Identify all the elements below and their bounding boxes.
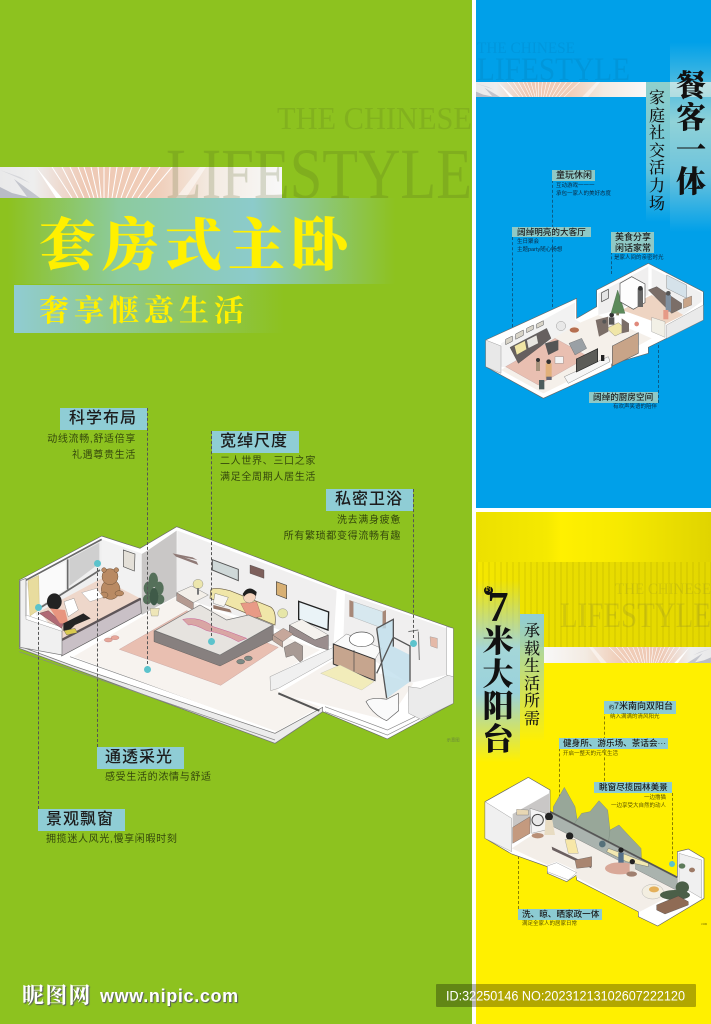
title: 餐客一体: 体 — [676, 157, 706, 201]
callout: 通透采光: 感受生活的浓情与舒适 — [105, 772, 212, 783]
subtitle: 承载生活所需: 需 — [524, 706, 540, 729]
note: illustration caption: 示意图 — [447, 737, 460, 744]
rug — [506, 338, 588, 385]
wall frame — [602, 289, 608, 302]
subtitle: 家庭社交活力场: 交 — [649, 138, 665, 161]
title: 7米大阳台: 7 — [488, 585, 508, 631]
callout: 健身所 游乐场 茶话会: 健身所、游乐场、茶话会··· — [563, 738, 666, 748]
callout: 眺窗尽揽园林美景 — [594, 782, 672, 809]
man in bed — [213, 588, 262, 618]
stripe texture — [476, 562, 711, 647]
callout: 宽绰尺度 — [212, 431, 316, 483]
shelves and pictures — [173, 553, 287, 599]
callout: 阔绰的厨房空间: 有欢声笑语的陪伴 — [613, 404, 657, 410]
subtitle: 家庭社交活力场: 场 — [649, 191, 665, 214]
badge: 约: 约 — [485, 587, 492, 593]
callout lines and dots — [35, 408, 417, 809]
panel: blue living room poster — [476, 0, 711, 508]
decorative heading: lifestyle: LIFESTYLE — [477, 52, 630, 88]
callout: 阔绰明亮的大客厅: 主题party随心畅想 — [517, 247, 562, 253]
callout: 景观飘窗: 拥揽迷人风光,慢享闲暇时刻 — [46, 834, 178, 845]
callout: 童玩休闲 — [552, 170, 611, 197]
woman with laundry — [532, 813, 555, 838]
callout: 阔绰明亮的大客厅 — [512, 227, 591, 253]
shell — [486, 263, 703, 398]
yoga person and bench — [552, 832, 592, 868]
woman reading — [39, 588, 103, 635]
callout: 科学布局: 动线流畅,舒适倍享 — [47, 434, 136, 445]
subtitle: 承载生活所需: 生 — [524, 653, 540, 676]
callout: 私密卫浴: 洗去满身疲惫 — [337, 515, 401, 526]
callout lines — [512, 181, 659, 403]
shell — [485, 777, 704, 926]
subtitle: 承载生活所需 — [524, 618, 540, 729]
title: 7米大阳台: 大 — [482, 648, 514, 694]
callout: 景观飘窗: 景观飘窗 — [46, 811, 114, 828]
fan texture strip — [476, 82, 711, 97]
low partition wall — [270, 647, 333, 711]
panel: yellow balcony poster — [476, 512, 711, 1024]
washer and cabinet — [513, 808, 546, 843]
callout: 通透采光 — [97, 747, 212, 783]
callout: 美食分享 闲话家常: 是家人间的亲密时光 — [614, 255, 664, 261]
callout: 眺窗尽揽园林美景: 一边撸猫 — [644, 795, 666, 801]
subtitle: 家庭社交活力场 — [649, 85, 665, 214]
callout: 约7米南向双阳台: 约7米南向双阳台 — [609, 701, 673, 711]
plants — [657, 863, 695, 914]
family group — [536, 321, 587, 389]
callout: 洗晾晒家政一体 — [518, 909, 602, 927]
callout: 宽绰尺度: 宽绰尺度 — [220, 433, 288, 450]
callout: 科学布局: 科学布局 — [69, 410, 137, 427]
callout: 健身所 游乐场 茶话会: 开启一整天的元气生活 — [563, 751, 618, 757]
callout lines — [518, 714, 675, 909]
callout: 洗晾晒家政一体: 洗、晾、晒家政一体 — [522, 909, 599, 919]
callout: 私密卫浴: 私密卫浴 — [335, 491, 403, 508]
tv unit — [564, 349, 610, 383]
callout: 美食分享 闲话家常 — [611, 232, 664, 261]
callout: 宽绰尺度: 满足全周期人居生活 — [220, 472, 316, 483]
dining table group — [596, 313, 629, 337]
fan texture strip — [0, 167, 282, 198]
callout: 科学布局: 礼遇尊贵生活 — [72, 450, 136, 461]
wall art — [506, 321, 543, 345]
watermark id box — [436, 984, 696, 1007]
callout: 阔绰的厨房空间 — [589, 392, 658, 410]
subtitle: 承载生活所需: 载 — [524, 636, 540, 659]
callout: 通透采光: 通透采光 — [105, 749, 173, 766]
dining cabinet — [612, 333, 638, 366]
illustration: bedroom suite isometric cutaway — [19, 526, 460, 744]
callout: 宽绰尺度: 二人世界、三口之家 — [220, 456, 316, 467]
title: 套房式主卧 — [39, 200, 354, 282]
title: 7米大阳台: 台 — [482, 714, 514, 758]
christmas tree — [611, 290, 625, 315]
round rug and cat — [642, 884, 663, 899]
subtitle: 奢享惬意生活 — [39, 286, 249, 330]
illustration: living dining kitchen cutaway — [485, 263, 704, 399]
slippers grey — [237, 656, 252, 664]
callout: 阔绰的厨房空间: 阔绰的厨房空间 — [593, 392, 653, 402]
title: 7米大阳台: 阳 — [482, 681, 514, 726]
sofa — [510, 328, 551, 363]
subtitle: 家庭社交活力场: 家 — [649, 85, 665, 108]
watermark id box: ID:32250146 NO:20231213102607222120 — [446, 988, 685, 1004]
decorative heading: lifestyle: THE CHINESE — [477, 40, 575, 57]
illustration: balcony cutaway — [484, 777, 707, 926]
callout: 美食分享 闲话家常: 美食分享 — [615, 232, 651, 242]
title band — [670, 42, 711, 232]
fan texture strip — [544, 647, 711, 663]
watermark logo: 昵图网 — [22, 979, 92, 1010]
note: illustration caption: 示意图 — [701, 922, 707, 926]
table with children — [599, 841, 648, 877]
callout: 童玩休闲: 童玩休闲 — [556, 170, 592, 180]
callout: 阔绰明亮的大客厅: 阔绰明亮的大客厅 — [517, 227, 586, 237]
callout: 约7米南向双阳台 — [604, 701, 676, 720]
title gradient band — [0, 198, 395, 284]
nightstand and lamp — [177, 579, 208, 610]
title: 餐客一体: 餐 — [676, 61, 706, 105]
callout: 眺窗尽揽园林美景: 眺窗尽揽园林美景 — [599, 782, 668, 792]
subtitle gradient band — [14, 285, 284, 333]
bathroom fixtures — [321, 600, 453, 721]
slippers pink — [104, 636, 119, 642]
callout: 美食分享 闲话家常: 闲话家常 — [615, 242, 651, 252]
vanity desk and tv — [273, 601, 329, 662]
callout: 眺窗尽揽园林美景: 一边享受大自然的动人 — [611, 803, 666, 809]
white gutter between right panels — [476, 508, 711, 512]
subtitle: 家庭社交活力场: 力 — [649, 173, 665, 196]
title: 餐客一体: 一 — [676, 125, 706, 169]
subtitle band — [520, 614, 544, 742]
callout: 科学布局 — [47, 408, 147, 461]
callout: 健身所 游乐场 茶话会 — [559, 738, 668, 757]
plant — [143, 573, 164, 616]
title: 7米大阳台 — [482, 585, 514, 758]
headboard — [210, 588, 275, 625]
teddy bear — [100, 568, 124, 599]
watermark url: www.nipic.com — [100, 986, 239, 1006]
subtitle: 家庭社交活力场: 庭 — [649, 103, 665, 126]
window bay — [20, 539, 141, 656]
subtitle: 家庭社交活力场: 活 — [649, 155, 665, 178]
subtitle band — [646, 82, 670, 222]
callout: 阔绰明亮的大客厅: 生日聚会 — [517, 239, 539, 245]
subtitle: 承载生活所需: 所 — [524, 688, 540, 711]
title band — [476, 580, 520, 762]
callout: 景观飘窗 — [38, 809, 178, 845]
title: 餐客一体 — [676, 61, 706, 201]
subtitle: 承载生活所需: 承 — [524, 618, 540, 641]
callout: 私密卫浴 — [284, 489, 413, 542]
panel: green main poster — [0, 0, 472, 1024]
callout: 童玩休闲: 互动游戏一一一 — [556, 183, 595, 189]
title: 7米大阳台: 米 — [482, 616, 514, 661]
shell — [19, 527, 453, 743]
top gradient banding — [476, 512, 711, 562]
badge: 约 — [484, 586, 493, 595]
callout: 约7米南向双阳台: 纳入满满的清风阳光 — [610, 714, 660, 720]
garden hills — [553, 787, 642, 861]
rug — [119, 611, 278, 685]
callout: 童玩休闲: 承包一家人的美好态度 — [556, 191, 611, 197]
kitchen — [620, 275, 692, 337]
white gutter — [472, 0, 476, 1024]
subtitle: 家庭社交活力场: 社 — [649, 120, 665, 143]
subtitle: 承载生活所需: 活 — [524, 671, 540, 694]
callout: 私密卫浴: 所有繁琐都变得流畅有趣 — [284, 531, 401, 542]
callout: 洗晾晒家政一体: 满足全家人的居家日常 — [522, 921, 577, 927]
decorative heading: lifestyle — [477, 40, 630, 88]
bed — [154, 605, 273, 666]
title: 餐客一体: 客 — [676, 93, 706, 137]
